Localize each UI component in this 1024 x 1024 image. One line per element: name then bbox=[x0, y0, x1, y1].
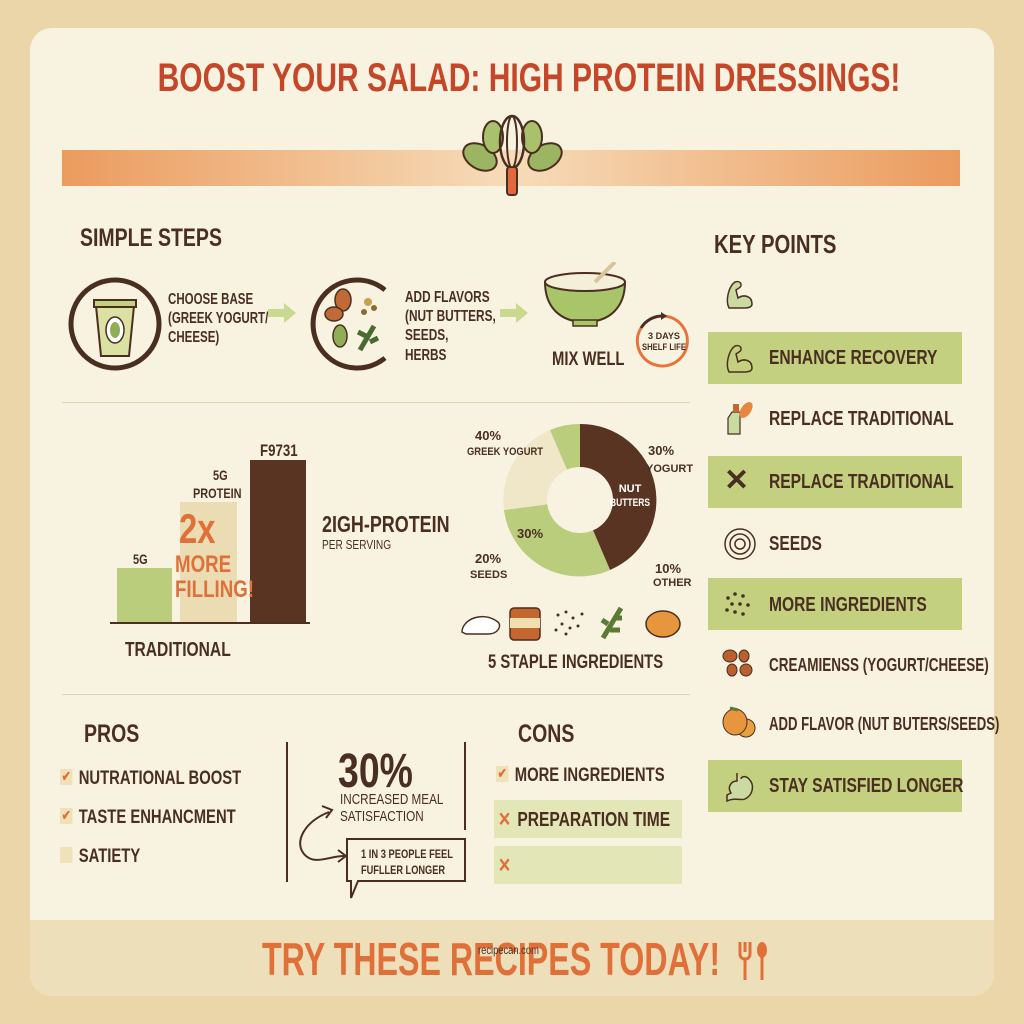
footer band bbox=[30, 920, 994, 996]
icon: whisk with leaves bbox=[462, 114, 563, 196]
text: CHEESE) bbox=[168, 329, 219, 346]
speech box bbox=[346, 838, 466, 898]
key points: ADD FLAVOR (NUT BUTERS/SEEDS) bbox=[769, 714, 999, 734]
badge: 3 days shelf life: SHELF LIFE bbox=[642, 342, 686, 352]
pros: NUTRATIONAL BOOST bbox=[79, 768, 241, 789]
text bbox=[405, 289, 496, 364]
pie chart: 30% bbox=[648, 443, 674, 458]
step 1 bbox=[68, 278, 268, 370]
pie chart: SEEDS bbox=[470, 569, 507, 581]
bar chart: 2IGH-PROTEIN bbox=[322, 511, 450, 537]
key points: ENHANCE RECOVERY bbox=[769, 347, 937, 369]
key points: ✕ bbox=[724, 464, 749, 497]
pie chart: YOGURT bbox=[646, 463, 693, 475]
heading: simple steps: SIMPLE STEPS bbox=[80, 224, 222, 252]
pie chart: NUT bbox=[619, 483, 642, 495]
text: ADD FLAVORS bbox=[405, 289, 490, 306]
cons bbox=[494, 720, 682, 884]
bar chart: 2x bbox=[179, 505, 215, 552]
text: HERBS bbox=[405, 347, 446, 364]
bar chart: F9731 bbox=[260, 441, 298, 460]
key points: REPLACE TRADITIONAL bbox=[769, 408, 954, 430]
pros: PROS bbox=[84, 720, 139, 748]
pros: ✔ bbox=[62, 768, 71, 784]
stat callout: 30% bbox=[338, 745, 413, 798]
key points bbox=[708, 229, 999, 812]
cons: MORE INGREDIENTS bbox=[515, 765, 665, 786]
icon: nuts and herbs bbox=[310, 278, 386, 370]
label: staple ingredients: 5 STAPLE INGREDIENTS bbox=[488, 652, 663, 673]
badge: 3 days shelf life: 3 DAYS bbox=[648, 331, 680, 341]
gradient bar bbox=[62, 150, 960, 186]
key points: MORE INGREDIENTS bbox=[769, 594, 927, 616]
key points: SEEDS bbox=[769, 533, 822, 555]
key points: REPLACE TRADITIONAL bbox=[769, 471, 954, 493]
pie chart: OTHER bbox=[653, 577, 692, 589]
cons: ✕ bbox=[498, 855, 511, 877]
icon: yogurt cup bbox=[68, 278, 162, 370]
bar chart: 5G bbox=[213, 467, 228, 483]
text: (NUT BUTTERS, bbox=[405, 308, 496, 325]
pie chart: 40% bbox=[475, 428, 501, 443]
pie chart: 10% bbox=[655, 561, 681, 576]
icon: fork and spoon bbox=[738, 942, 767, 980]
pie chart: 30% bbox=[517, 526, 543, 541]
badge: 3 days shelf life bbox=[636, 312, 689, 368]
bar chart: PROTEIN bbox=[193, 485, 242, 501]
bar chart: PER SERVING bbox=[322, 537, 391, 552]
bar chart: FILLING! bbox=[175, 576, 254, 603]
pros bbox=[60, 720, 241, 867]
text bbox=[168, 291, 268, 346]
icon: arm bbox=[726, 280, 753, 309]
stat callout bbox=[286, 742, 466, 898]
pie chart: 20% bbox=[475, 551, 501, 566]
key points: KEY POINTS bbox=[714, 229, 836, 259]
pros: ✔ bbox=[62, 807, 71, 823]
bar chart bbox=[110, 441, 450, 661]
pie chart bbox=[467, 424, 693, 589]
pros: SATIETY bbox=[79, 846, 140, 867]
key points: CREAMIENSS (YOGURT/CHEESE) bbox=[769, 655, 989, 675]
text: SEEDS, bbox=[405, 327, 448, 344]
cons: ✕ PREPARATION TIME bbox=[498, 809, 670, 831]
stat callout: INCREASED MEAL bbox=[340, 791, 443, 808]
arrow curve bbox=[299, 805, 346, 863]
text: (GREEK YOGURT/ bbox=[168, 310, 268, 327]
arrow bbox=[268, 303, 296, 323]
title: BOOST YOUR SALAD: HIGH PROTEIN DRESSINGS! bbox=[158, 56, 900, 100]
watermark: recipecan.com bbox=[478, 943, 539, 957]
arrow bbox=[500, 303, 528, 323]
speech box: FUFLLER LONGER bbox=[361, 863, 445, 877]
pie chart: BUTTERS bbox=[610, 497, 650, 509]
stat callout: SATISFACTION bbox=[340, 808, 424, 824]
pie chart: GREEK YOGURT bbox=[467, 446, 543, 458]
footer call to action: TRY THESE RECIPES TODAY! bbox=[262, 933, 720, 985]
bar chart: TRADITIONAL bbox=[125, 639, 231, 661]
key points: STAY SATISFIED LONGER bbox=[769, 775, 963, 797]
text: MIX WELL bbox=[552, 349, 624, 370]
icon: bowl bbox=[544, 262, 626, 327]
bar chart: 5G bbox=[133, 551, 148, 567]
step 3: mix well bbox=[544, 262, 689, 370]
step 2 bbox=[310, 278, 496, 370]
cons: ✔ bbox=[498, 765, 507, 781]
bar chart: MORE bbox=[175, 551, 231, 578]
icons: staple ingredients bbox=[461, 606, 681, 641]
pros: TASTE ENHANCMENT bbox=[79, 807, 236, 828]
cons: CONS bbox=[518, 720, 574, 748]
text: CHOOSE BASE bbox=[168, 291, 253, 308]
